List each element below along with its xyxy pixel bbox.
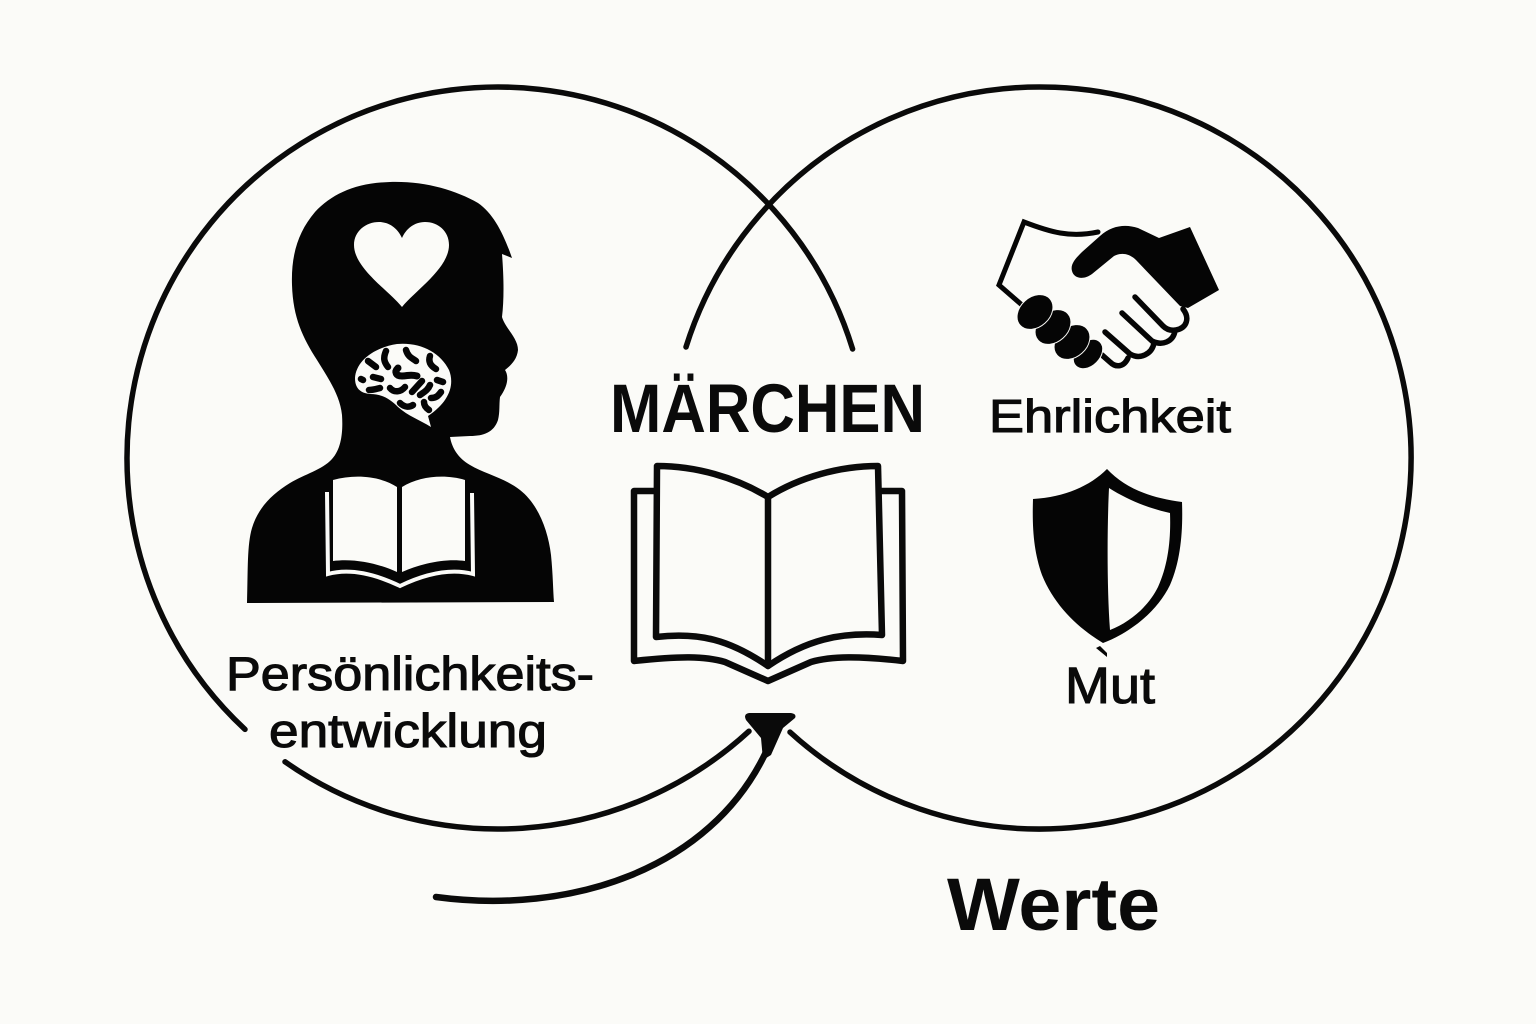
icon: person silhouette	[247, 182, 554, 603]
icon: shield	[1033, 469, 1182, 657]
icon: heart	[354, 222, 449, 307]
label: Persönlichkeits-: Persönlichkeits-	[226, 647, 594, 700]
icon: small open book	[327, 477, 473, 586]
icon: brain	[355, 344, 451, 427]
title: MÄRCHEN: MÄRCHEN	[610, 370, 925, 447]
right circle: Werte	[686, 87, 1411, 829]
label: Werte: Werte	[947, 863, 1160, 946]
label: Mut: Mut	[1065, 657, 1155, 714]
icon: handshake	[999, 222, 1219, 375]
left circle: Persönlichkeitsentwicklung	[127, 87, 853, 829]
icon: large open book	[634, 466, 903, 681]
arrow pointing to the book	[436, 713, 796, 901]
label: Ehrlichkeit: Ehrlichkeit	[989, 390, 1231, 442]
label: entwicklung: entwicklung	[269, 704, 547, 757]
